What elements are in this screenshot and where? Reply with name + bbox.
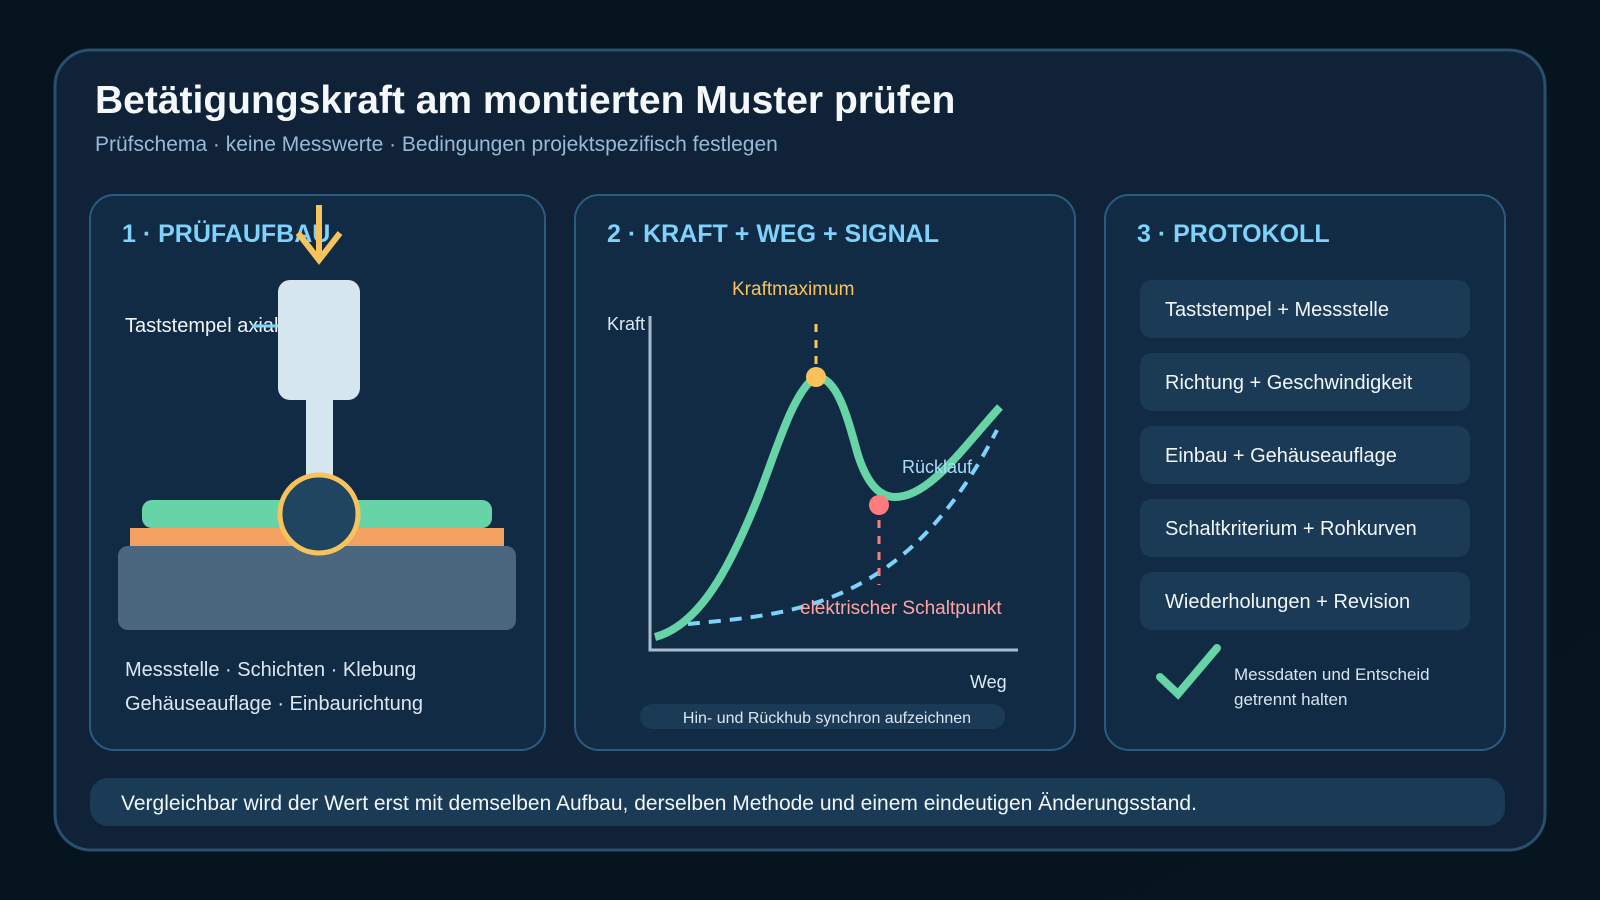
force curve [655,377,1000,637]
return curve [688,430,997,624]
note pill [640,704,1005,729]
caption: Messstelle · Schichten · Klebung [125,659,416,681]
subtitle: Prüfschema · keine Messwerte · Bedingungen projektspezifisch festlegen [95,133,778,156]
row 1: Taststempel + Messstelle [1165,299,1389,321]
switch guide [878,520,880,585]
icon: check mark [1160,648,1217,694]
label: Weg: Weg [970,672,1007,692]
row 1 [1140,280,1470,338]
row 2: Richtung + Geschwindigkeit [1165,372,1413,394]
row 5: Wiederholungen + Revision [1165,591,1410,613]
heading: Kraft Weg Signal: 2 · KRAFT + WEG + SIGNAL [607,220,939,248]
label: Rücklauf: Rücklauf [902,457,973,477]
footer callout [90,778,1505,826]
base block [118,546,516,630]
row 5 [1140,572,1470,630]
label: Kraft: Kraft [607,314,645,334]
switch point [869,495,889,515]
chart axes [650,316,1018,650]
label: Kraftmaximum: Kraftmaximum [732,279,854,300]
note pill: Hin- und Rückhub synchron aufzeichnen [683,710,971,727]
row 2 [1140,353,1470,411]
panel: Kraft Weg Signal [575,195,1075,750]
label: Taststempel axial: Taststempel axial [125,315,278,337]
caption: Gehäuseauflage · Einbaurichtung [125,693,423,715]
maximum guide [814,324,818,370]
title: Betätigungskraft am montierten Muster prüfen [95,79,955,122]
maximum point [806,367,826,387]
probe head [278,280,360,400]
panel: Protokoll [1105,195,1505,750]
leader line [252,324,280,328]
force arrow [298,205,340,260]
panel: Prüfaufbau [90,195,545,750]
heading: Protokoll: 3 · PROTOKOLL [1137,220,1330,248]
row 3: Einbau + Gehäuseauflage [1165,445,1397,467]
row 4: Schaltkriterium + Rohkurven [1165,518,1417,540]
green layer [142,500,492,528]
orange layer [130,528,504,546]
measuring point circle [280,475,358,553]
heading: Prüfaufbau: 1 · PRÜFAUFBAU [122,219,330,248]
note: Messdaten und Entscheid [1234,665,1430,684]
caption [125,659,423,715]
note: getrennt halten [1234,690,1347,709]
note [1234,665,1430,709]
footer callout: Vergleichbar wird der Wert erst mit demselben Aufbau, derselben Methode und einem eindeutigen Änderungsstand. [121,792,1197,815]
row 3 [1140,426,1470,484]
label: elektrischer Schaltpunkt: elektrischer Schaltpunkt [800,598,1002,619]
probe stem [306,400,333,500]
row 4 [1140,499,1470,557]
